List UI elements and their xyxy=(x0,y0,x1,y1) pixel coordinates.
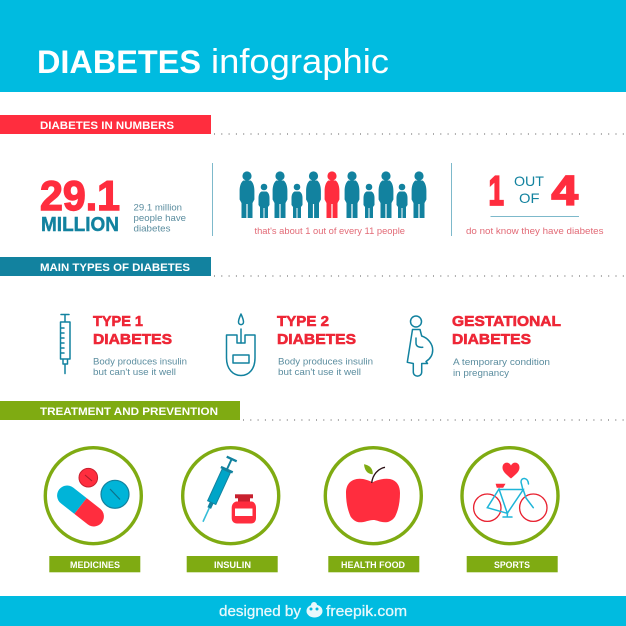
gestational diabetes: DIABETES xyxy=(452,331,531,348)
section heading: diabetes in numbers: DIABETES IN NUMBERS xyxy=(40,120,174,132)
section heading: treatment xyxy=(0,401,626,420)
card: medicines xyxy=(45,448,141,572)
stat: 29.1 million: 29.1 million xyxy=(134,202,182,214)
footer band xyxy=(0,596,626,626)
header band xyxy=(0,0,626,92)
card: sports: SPORTS xyxy=(494,560,530,570)
type 1 diabetes: but can't use it well xyxy=(93,367,176,378)
card: sports xyxy=(462,448,558,572)
card: health food xyxy=(325,448,421,572)
gestational diabetes: GESTATIONAL xyxy=(452,313,561,330)
icon: bicycle xyxy=(474,478,547,521)
type 1 diabetes: DIABETES xyxy=(93,331,172,348)
section heading: diabetes in numbers xyxy=(0,115,626,134)
footer band: designed by xyxy=(219,603,301,620)
type 1 diabetes: Body produces insulin xyxy=(93,356,187,368)
card: health food: HEALTH FOOD xyxy=(341,560,405,570)
card: insulin: INSULIN xyxy=(214,560,251,570)
stat: 1 out of 4: do not know they have diabetes xyxy=(466,226,604,237)
stat: 1 out of 4: OF xyxy=(519,190,540,206)
section heading: treatment: TREATMENT AND PREVENTION xyxy=(40,406,218,418)
type 2 diabetes: but can't use it well xyxy=(278,367,361,378)
section heading: main types xyxy=(0,257,626,276)
icon: glucose meter xyxy=(226,314,255,376)
icon: freepik bird xyxy=(306,602,322,618)
card: medicines: MEDICINES xyxy=(70,560,120,570)
stat: 1 out of 4: OUT xyxy=(514,173,544,189)
people pictogram xyxy=(240,171,426,218)
icon: pills xyxy=(53,468,129,531)
type 2 diabetes: TYPE 2 xyxy=(277,313,329,330)
stat: 1 out of 4: 1 xyxy=(488,167,504,214)
gestational diabetes: in pregnancy xyxy=(453,368,509,379)
stat: 29.1 million: people have xyxy=(134,213,186,224)
section heading: main types: MAIN TYPES OF DIABETES xyxy=(40,262,190,274)
icon: heart xyxy=(502,463,520,478)
type 1 diabetes: TYPE 1 xyxy=(93,313,143,330)
icon: syringe and vial xyxy=(197,455,256,524)
icon: apple xyxy=(346,464,400,522)
stat: 29.1 million: 29.1 xyxy=(40,172,120,219)
gestational diabetes: A temporary condition xyxy=(453,357,550,368)
stat: 29.1 million: MILLION xyxy=(41,214,119,236)
type 1 diabetes xyxy=(60,313,187,378)
stat: 29.1 million: diabetes xyxy=(134,224,171,234)
stat: 29.1 million xyxy=(40,172,186,236)
card: insulin xyxy=(183,448,279,572)
icon: pregnant woman xyxy=(407,316,433,376)
caption: 1 in 11: that's about 1 out of every 11 people xyxy=(254,226,405,237)
gestational diabetes xyxy=(407,313,561,379)
footer band: freepik.com xyxy=(326,603,407,620)
icon: syringe xyxy=(60,314,70,374)
title: DIABETES xyxy=(37,44,201,80)
type 2 diabetes xyxy=(226,313,373,378)
stat: 1 out of 4 xyxy=(466,167,604,237)
type 2 diabetes: DIABETES xyxy=(277,331,356,348)
title suffix: infographic xyxy=(211,43,389,81)
stat: 1 out of 4: 4 xyxy=(552,167,579,214)
type 2 diabetes: Body produces insulin xyxy=(278,356,373,368)
